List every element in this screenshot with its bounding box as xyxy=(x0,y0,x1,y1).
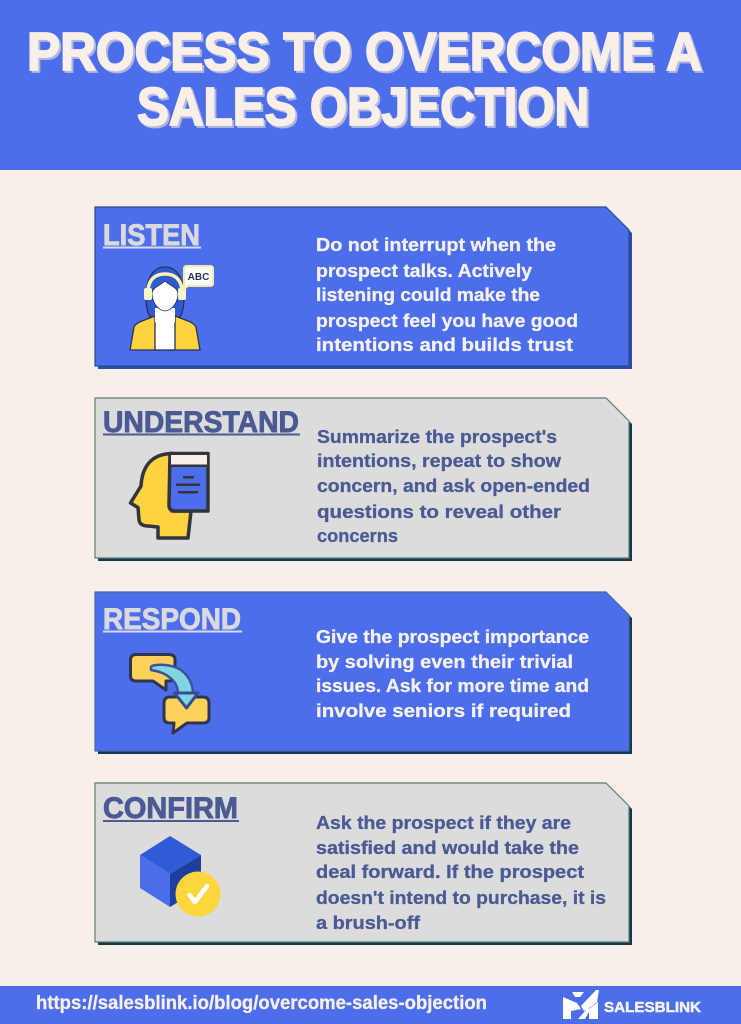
text block: listen: prospect feel you have good xyxy=(316,310,578,331)
footer url: https://salesblink.io/blog/overcome-sales-objection xyxy=(36,993,487,1014)
text block: respond: involve seniors if required xyxy=(316,700,571,721)
text block: understand: concerns xyxy=(317,525,398,546)
text block: understand: intentions, repeat to show xyxy=(317,450,562,471)
text block: confirm xyxy=(316,812,606,933)
icon: salesblink logo xyxy=(563,990,599,1019)
text block: listen: listening could make the xyxy=(316,284,540,305)
text block: listen: prospect talks. Actively xyxy=(316,260,533,281)
text block: confirm: satisfied and would take the xyxy=(316,837,579,858)
text block: confirm: deal forward. If the prospect xyxy=(316,861,584,882)
text block: listen: intentions and builds trust xyxy=(316,334,573,355)
text block: understand: questions to reveal other xyxy=(317,501,561,522)
heading: listen: LISTEN xyxy=(103,219,200,252)
icon: cube with check badge xyxy=(140,836,220,916)
text block: confirm: doesn't intend to purchase, it is xyxy=(316,887,606,908)
text block: confirm: Ask the prospect if they are xyxy=(316,812,571,833)
text block: understand xyxy=(317,426,590,546)
text block: respond xyxy=(316,626,589,721)
heading: understand: UNDERSTAND xyxy=(103,406,299,439)
text block: understand: Summarize the prospect's xyxy=(317,426,557,447)
text block: respond: issues. Ask for more time and xyxy=(316,675,589,696)
text block: confirm: a brush-off xyxy=(316,912,421,933)
title: PROCESS TO OVERCOME A xyxy=(27,22,702,82)
icon: person with headphones: ABC xyxy=(188,272,209,283)
logo wordmark: SALESBLINK xyxy=(604,999,701,1016)
text block: listen xyxy=(316,234,578,355)
title xyxy=(27,22,702,137)
panel: respond xyxy=(95,592,632,754)
panel: confirm xyxy=(95,783,632,945)
text block: listen: Do not interrupt when the xyxy=(316,234,556,255)
panel: listen xyxy=(95,207,632,369)
text block: respond: by solving even their trivial xyxy=(316,651,573,672)
header banner xyxy=(0,0,741,170)
title: SALES OBJECTION xyxy=(137,77,589,137)
heading: confirm: CONFIRM xyxy=(103,792,238,825)
text block: respond: Give the prospect importance xyxy=(316,626,589,647)
icon: person with headphones xyxy=(130,266,213,350)
heading: respond: RESPOND xyxy=(103,603,241,636)
icon: head with book xyxy=(130,454,208,538)
footer bar xyxy=(0,986,741,1024)
text block: understand: concern, and ask open-ended xyxy=(317,475,590,496)
icon: speech bubbles with arrow xyxy=(130,654,209,733)
panel: understand xyxy=(95,398,632,561)
